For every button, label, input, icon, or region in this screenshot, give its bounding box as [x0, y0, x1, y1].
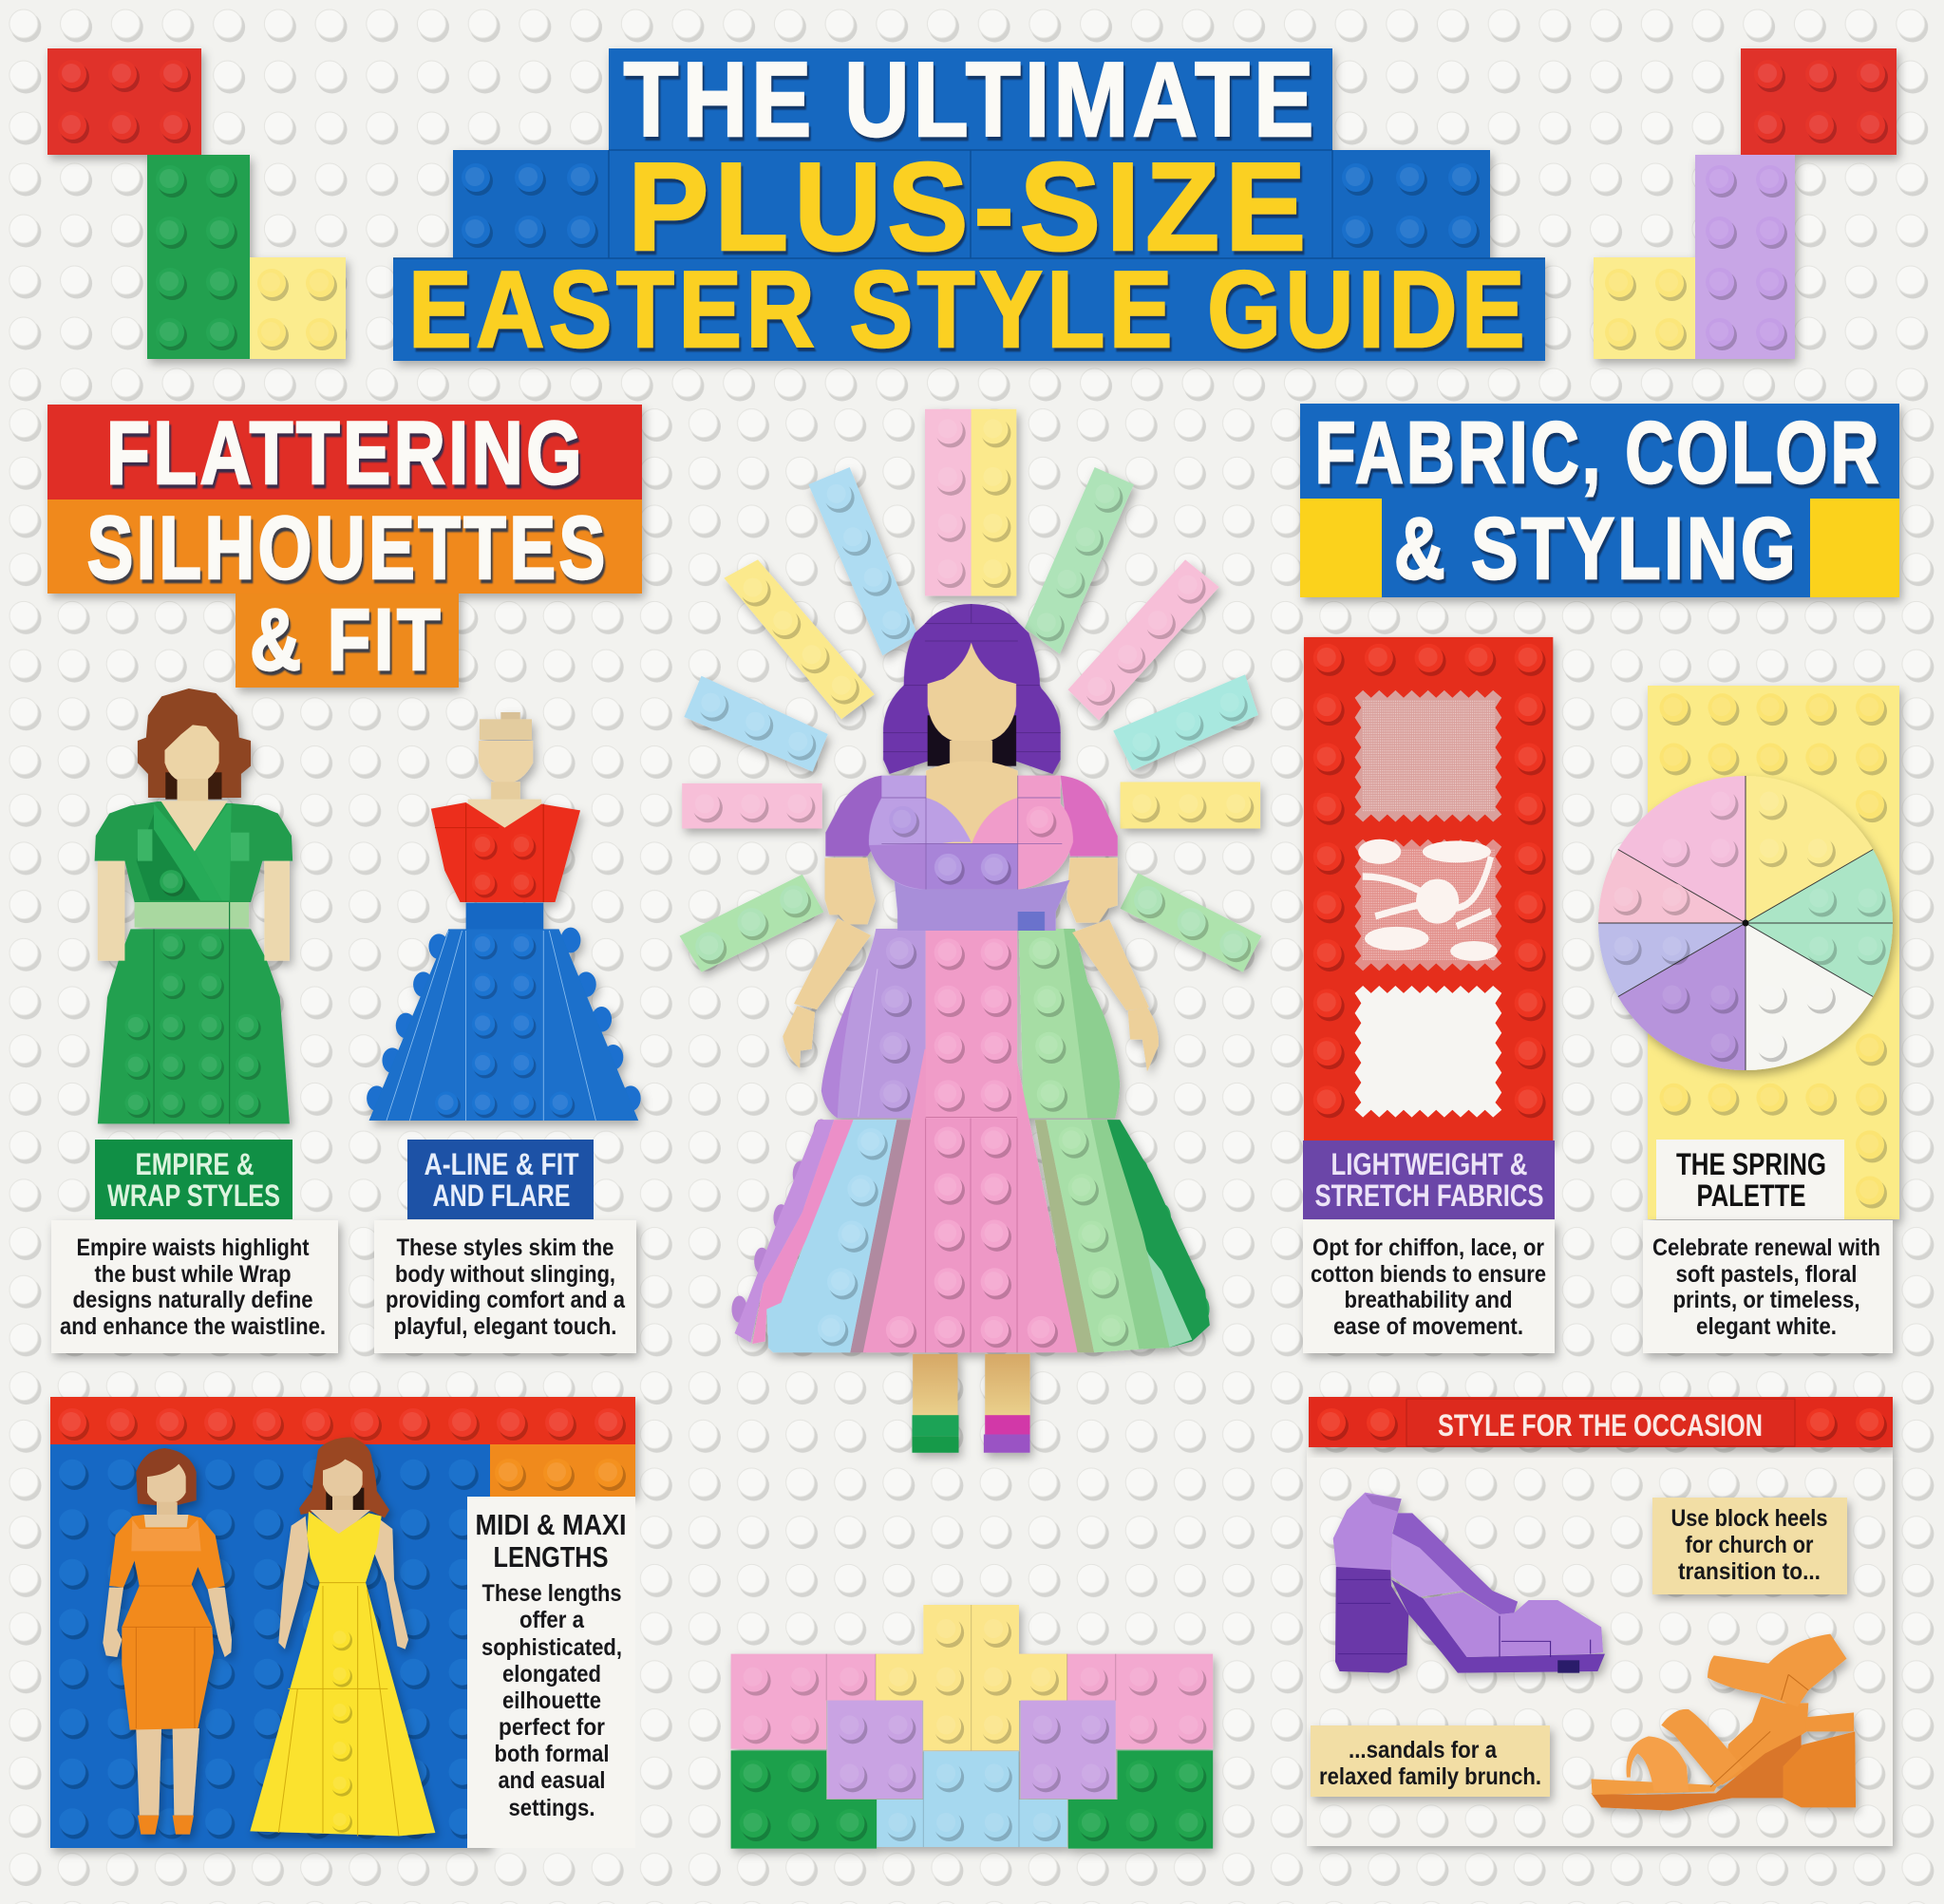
centre: pastel sunburst rays: [680, 409, 1261, 972]
midi text card: [467, 1497, 635, 1848]
text block: palette: Celebrate renewal with: [1652, 1235, 1880, 1261]
label: empire and wrap styles: WRAP STYLES: [107, 1178, 280, 1213]
text block: a-line description: playful, elegant touch.: [393, 1313, 617, 1340]
title line 2: PLUS-SIZE: [628, 137, 1312, 276]
midi text card: eilhouette: [502, 1687, 601, 1714]
heading: fabric, color and styling: [1300, 404, 1899, 597]
midi text card: both formal: [494, 1741, 610, 1767]
heading: flattering silhouettes and fit: SILHOUETTES: [87, 498, 608, 597]
note: block heels: [1652, 1498, 1847, 1594]
decorative bricks top left: [47, 48, 346, 359]
icon: purple block heel: [1333, 1493, 1605, 1673]
note: sandals: [1311, 1725, 1550, 1797]
figure: green empire wrap dress: [95, 688, 293, 1123]
text block: a-line description: body without slinging,: [395, 1261, 615, 1288]
note: block heels: Use block heels: [1671, 1505, 1827, 1532]
head, bust and sleeves: [824, 604, 1118, 931]
heading: fabric, color and styling: & STYLING: [1394, 500, 1799, 597]
decorative bricks top right: [1594, 48, 1897, 359]
heading: flattering silhouettes and fit: & FIT: [250, 592, 444, 688]
heading: flattering silhouettes and fit: FLATTERING: [106, 403, 585, 502]
text block: empire waists: the bust while Wrap: [95, 1261, 291, 1288]
midi text card: and easual: [498, 1767, 606, 1794]
text block: a-line description: [374, 1220, 636, 1353]
midi text card: sophisticated,: [481, 1634, 622, 1661]
panel: lightweight fabrics swatches: LIGHTWEIGHT &: [1331, 1147, 1527, 1181]
midi text card: elongated: [502, 1661, 601, 1687]
note: block heels: for church or: [1685, 1532, 1814, 1558]
panel: midi and maxi lengths: [50, 1397, 635, 1848]
panel: spring palette: PALETTE: [1696, 1178, 1806, 1213]
title line 3: EASTER STYLE GUIDE: [408, 250, 1529, 370]
label: empire and wrap styles: [95, 1140, 293, 1219]
midi text card: perfect for: [499, 1714, 605, 1741]
text block: empire waists: Empire waists highlight: [76, 1235, 310, 1261]
midi text card: These lengths: [482, 1580, 621, 1607]
label: a-line and fit and flare: A-LINE & FIT: [424, 1147, 579, 1181]
text block: fabrics: breathability and: [1345, 1287, 1512, 1313]
midi text card: offer a: [519, 1607, 585, 1633]
text block: fabrics: [1303, 1220, 1555, 1353]
panel: lightweight fabrics swatches: [1303, 637, 1555, 1353]
text block: fabrics: ease of movement.: [1333, 1313, 1523, 1340]
centre: pastel plus-size figure: [731, 604, 1210, 1453]
panel: style for the occasion: [1307, 1397, 1893, 1846]
text block: empire waists: [51, 1220, 338, 1353]
icon: orange sandal: [1591, 1634, 1856, 1811]
lower body and skirt: [731, 929, 1210, 1453]
text block: empire waists: designs naturally define: [72, 1287, 313, 1313]
cotton swatch: [1355, 986, 1501, 1118]
label: a-line and fit and flare: [407, 1140, 594, 1219]
note: block heels: transition to...: [1678, 1558, 1821, 1585]
lace swatch: [1355, 839, 1501, 971]
forearms and hands: [783, 918, 1159, 1071]
midi text card: settings.: [509, 1795, 595, 1821]
colour wheel: [1598, 776, 1893, 1070]
midi text card: LENGTHS: [494, 1540, 608, 1574]
text block: palette: prints, or timeless,: [1673, 1287, 1859, 1313]
figure: red and blue a-line dress: [367, 712, 641, 1121]
panel: spring palette: [1598, 686, 1899, 1353]
label: a-line and fit and flare: AND FLARE: [433, 1178, 570, 1213]
title block: [393, 41, 1545, 370]
panel: style for the occasion: STYLE FOR THE OCCASION: [1438, 1408, 1763, 1442]
chiffon swatch: [1355, 690, 1501, 821]
text block: a-line description: These styles skim the: [397, 1235, 614, 1261]
text block: palette: soft pastels, floral: [1675, 1261, 1858, 1288]
text block: palette: elegant white.: [1696, 1313, 1837, 1340]
text block: palette: [1643, 1220, 1893, 1353]
note: sandals: relaxed family brunch.: [1319, 1763, 1541, 1790]
bottom centre pastel brick mosaic: [731, 1605, 1213, 1849]
heading: flattering silhouettes and fit: [47, 403, 642, 688]
text block: fabrics: Opt for chiffon, lace, or: [1312, 1235, 1544, 1261]
panel: spring palette: THE SPRING: [1676, 1147, 1826, 1181]
figure: orange midi dress: [103, 1448, 232, 1835]
text block: a-line description: providing comfort and a: [386, 1287, 626, 1313]
label: empire and wrap styles: EMPIRE &: [135, 1147, 255, 1181]
panel: lightweight fabrics swatches: STRETCH FABRICS: [1314, 1178, 1544, 1213]
text block: fabrics: cotton biends to ensure: [1311, 1261, 1546, 1288]
figure: yellow maxi dress: [250, 1437, 435, 1836]
note: sandals: ...sandals for a: [1349, 1737, 1498, 1763]
midi text card: MIDI & MAXI: [475, 1508, 627, 1541]
text block: empire waists: and enhance the waistline.: [60, 1313, 326, 1340]
title line 1: THE ULTIMATE: [623, 41, 1318, 159]
